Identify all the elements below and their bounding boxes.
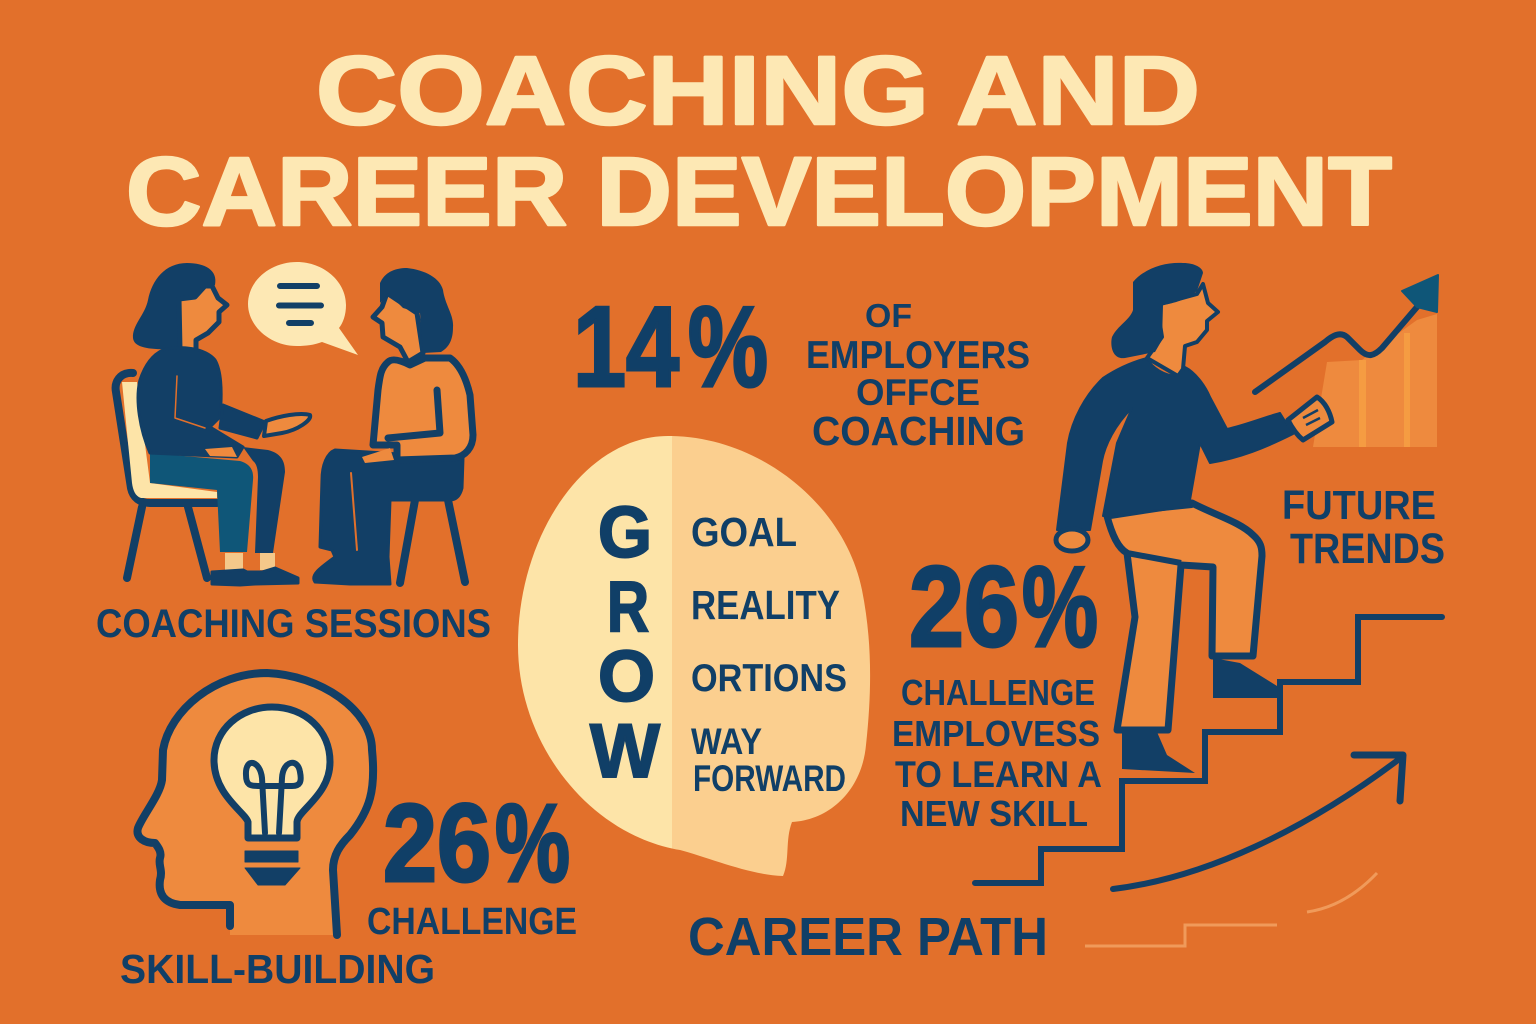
stat: 26 percent challenge: 26: [383, 782, 491, 905]
stat: 14 percent: EMPLOYERS: [806, 334, 1030, 377]
GROW labels: WAY: [691, 721, 762, 762]
label: career path: CAREER PATH: [688, 907, 1048, 967]
stat: 14 percent: OFFCE: [856, 372, 980, 413]
label: coaching sessions: COACHING SESSIONS: [96, 602, 491, 646]
GROW labels: ORTIONS: [691, 657, 847, 700]
illustration: coaching sessions: [116, 262, 473, 585]
chair: left: [116, 373, 217, 578]
speech bubble: [248, 262, 358, 355]
stat: 26 percent employees: [892, 544, 1102, 834]
chart: future trends: [1255, 275, 1438, 447]
person: left coach: [133, 263, 310, 585]
GROW letters: O: [598, 637, 655, 717]
GROW head model: [518, 436, 870, 876]
stat: 26 percent employees: EMPLOVESS: [892, 713, 1100, 754]
stat: 14 percent: %: [688, 284, 768, 411]
stat: 26 percent challenge: CHALLENGE: [367, 901, 577, 943]
stat: 26 percent challenge: [367, 782, 577, 943]
GROW letters: W: [590, 709, 660, 794]
stat: 14 percent: [573, 284, 1030, 454]
illustration: stairs: [975, 617, 1442, 883]
stat: 26 percent employees: %: [1022, 544, 1098, 671]
stat: 26 percent challenge: %: [495, 782, 570, 905]
GROW labels: GOAL: [691, 509, 797, 555]
GROW labels: REALITY: [691, 582, 840, 628]
icon: head with light bulb: [137, 673, 373, 935]
label: future trends: FUTURE: [1282, 482, 1436, 528]
label: skill-building: SKILL-BUILDING: [120, 946, 435, 992]
stat: 26 percent employees: NEW SKILL: [900, 793, 1088, 834]
GROW labels: [691, 509, 847, 799]
person: climbing stairs: [1056, 263, 1332, 773]
stat: 14 percent: COACHING: [812, 408, 1025, 454]
stat: 26 percent employees: 26: [909, 544, 1019, 671]
stat: 14 percent: OF: [865, 297, 912, 334]
title: CAREER DEVELOPMENT: [126, 137, 1392, 246]
label: future trends: [1282, 482, 1445, 573]
faint steps: [1085, 873, 1377, 946]
stat: 26 percent employees: TO LEARN A: [895, 754, 1102, 795]
arrow: career growth: [1113, 755, 1403, 889]
GROW letters: G: [598, 493, 652, 573]
stat: 14 percent: 14: [573, 284, 679, 411]
stat: 26 percent employees: CHALLENGE: [901, 672, 1095, 713]
person: right coachee: [314, 268, 473, 584]
GROW letters: R: [607, 568, 649, 647]
label: future trends: TRENDS: [1290, 525, 1445, 573]
GROW letters: [590, 493, 660, 794]
title: COACHING AND: [316, 36, 1200, 145]
title: [126, 36, 1392, 246]
GROW labels: FORWARD: [693, 758, 846, 799]
